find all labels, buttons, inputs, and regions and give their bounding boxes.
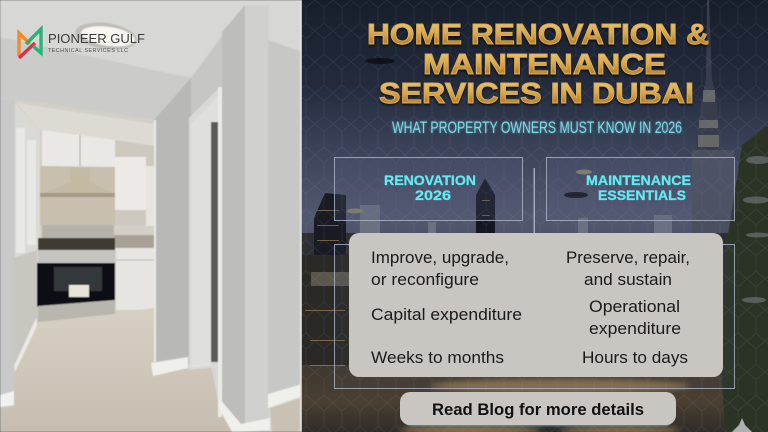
renovation column: or reconfigure	[371, 271, 479, 289]
photo: lower cabinets and counter	[114, 235, 154, 310]
hex pattern overlay	[302, 0, 768, 432]
logo wordmark: PIONEER GULF	[48, 32, 145, 46]
flying vehicle: right	[564, 192, 588, 198]
photo: upper wall	[0, 37, 191, 432]
photo: floor	[0, 308, 240, 432]
maintenance column: expenditure	[589, 320, 681, 338]
title line 3: SERVICES IN DUBAI	[379, 78, 694, 110]
photo: kitchen opening	[15, 99, 156, 400]
renovation heading: 2026	[415, 187, 451, 203]
panel: comparison card	[349, 233, 723, 377]
photo: lower left kitchen wall	[14, 250, 37, 370]
renovation column: Improve, upgrade,	[371, 249, 509, 267]
photo: oven	[37, 225, 115, 322]
city: greenery terraces	[722, 125, 768, 432]
photo: centre pillar	[154, 78, 191, 364]
outline frame behind comparison panel	[334, 244, 734, 388]
maintenance column: Operational	[589, 298, 680, 316]
panel: renovation heading box	[334, 158, 522, 220]
city: window lights	[305, 200, 490, 366]
renovation column: Weeks to months	[371, 349, 504, 367]
button glow	[402, 398, 674, 426]
renovation heading	[384, 172, 476, 203]
city: left block	[302, 255, 349, 365]
panel: dark city background	[302, 0, 768, 432]
maintenance column: Hours to days	[582, 349, 688, 367]
maintenance heading: ESSENTIALS	[598, 187, 686, 203]
photo: left wall pillar	[0, 100, 14, 395]
logo tagline: TECHNICAL SERVICES LLC	[48, 48, 128, 54]
maintenance column	[566, 249, 690, 367]
title	[367, 19, 709, 110]
city: small mid buildings	[360, 205, 672, 237]
city: low skyline	[302, 233, 768, 432]
city: Burj lights	[698, 90, 719, 147]
city: Burj tower	[692, 0, 721, 232]
panel: maintenance heading box	[546, 158, 734, 220]
button: read blog: Read Blog for more details	[432, 400, 644, 419]
panel: kitchen photo	[0, 0, 302, 432]
button: read blog	[400, 392, 676, 425]
photo: right wall	[268, 40, 302, 395]
photo: door frame	[189, 87, 222, 370]
photo: wall above door	[191, 5, 245, 200]
maintenance column: Preserve, repair,	[566, 249, 690, 267]
city: left tower	[314, 193, 346, 310]
flying vehicle: top	[365, 58, 395, 64]
photo: ceiling light	[73, 19, 139, 53]
logo icon	[19, 29, 41, 58]
city: centre tower	[476, 178, 495, 235]
renovation heading: RENOVATION	[384, 172, 476, 188]
city: centre spire	[534, 168, 535, 238]
maintenance heading	[586, 172, 691, 203]
maintenance column: and sustain	[584, 271, 672, 289]
logo: Pioneer Gulf	[19, 29, 145, 58]
renovation column	[371, 249, 522, 367]
city: right tall buildings	[692, 150, 734, 240]
maintenance heading: MAINTENANCE	[586, 172, 691, 188]
flying vehicle: gold left	[347, 208, 363, 214]
flying vehicle: gold upper right	[576, 170, 592, 174]
city: road glow	[400, 379, 690, 432]
title line 2: MAINTENANCE	[423, 49, 666, 81]
icon: sparkle	[732, 418, 752, 432]
photo: ceiling	[0, 0, 302, 78]
renovation column: Capital expenditure	[371, 306, 522, 324]
title line 1: HOME RENOVATION &	[367, 19, 709, 51]
photo: main pillar	[222, 5, 245, 432]
